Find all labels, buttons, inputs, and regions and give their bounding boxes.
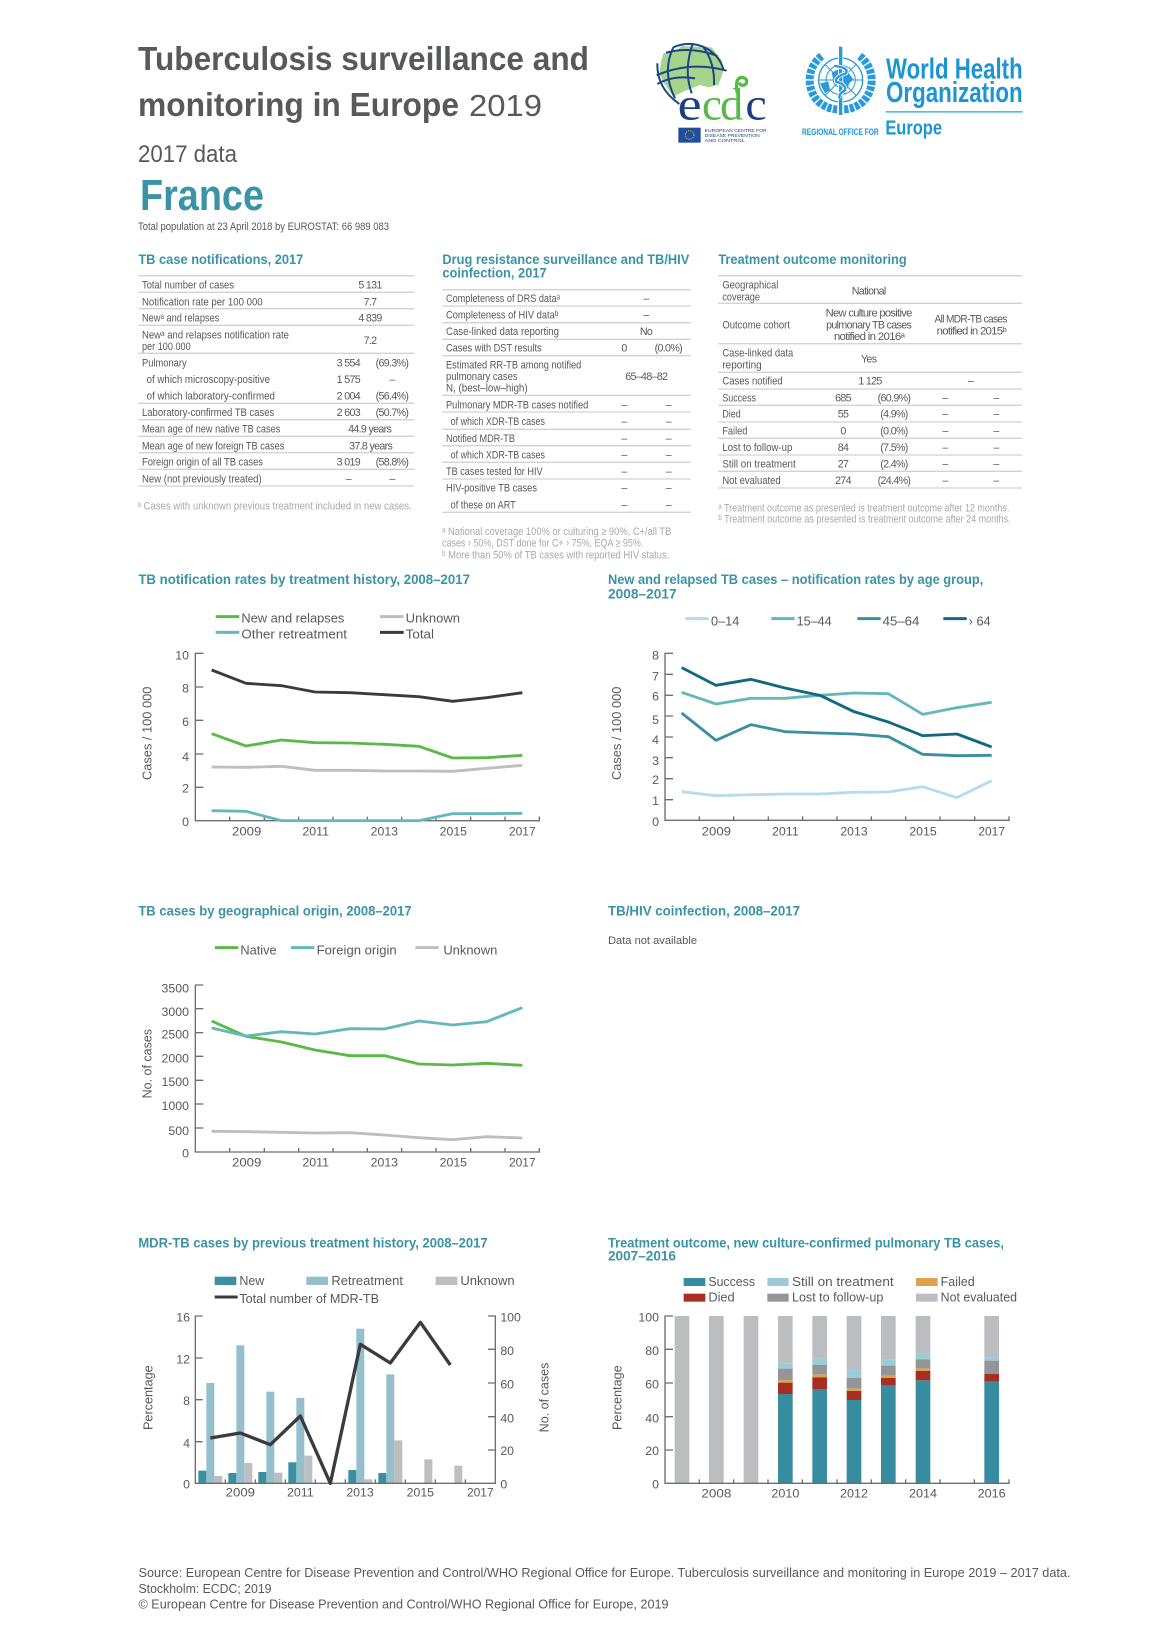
- heading: Treatment outcome monitoring: [718, 252, 907, 267]
- axes: [652, 648, 1009, 838]
- table rows: Still on treatment: [722, 458, 796, 470]
- axes: 2010: [771, 1487, 799, 1501]
- axes: 7: [652, 669, 659, 683]
- axes: 60: [500, 1377, 514, 1391]
- population note: Total population at 23 April 2018 by EUROSTAT: 66 989 083: [138, 221, 389, 233]
- axes: 2011: [772, 824, 799, 838]
- table rows: 65–48–82: [625, 371, 668, 383]
- heading: TB/HIV coinfection, 2008–2017: [608, 904, 800, 919]
- panel: MDR-TB by previous treatment bar and line chart: [138, 1235, 551, 1500]
- table rows: 0: [840, 425, 846, 437]
- table rows: All MDR-TB cases: [934, 314, 1007, 326]
- legend: Native: [240, 942, 277, 957]
- WHO wordmark: REGIONAL OFFICE FOR: [802, 127, 879, 137]
- legend: Not evaluated: [941, 1290, 1017, 1305]
- y axis title: Cases / 100 000: [609, 687, 624, 780]
- table rows: –: [621, 450, 627, 462]
- title: Tuberculosis surveillance and: [138, 40, 589, 77]
- axes: 2015: [440, 1156, 467, 1170]
- axes: 2016: [978, 1487, 1006, 1501]
- title: 2019: [469, 88, 542, 123]
- table rows: –: [666, 433, 672, 445]
- WHO wordmark: World Health: [886, 54, 1023, 86]
- axes: [175, 648, 539, 838]
- ECDC flag and name: DISEASE PREVENTION: [705, 133, 760, 139]
- header: title block: [138, 40, 589, 233]
- legend: Total: [406, 626, 434, 641]
- line series: [212, 1008, 522, 1140]
- axes: 2017: [467, 1486, 494, 1500]
- legend: Failed: [941, 1274, 975, 1289]
- table rows: (2.4%): [880, 458, 908, 470]
- table rows: 5 131: [358, 280, 382, 292]
- source footer: Source: European Centre for Disease Prevention and Control/WHO Regional Office for Europe. Tuberculosis surveillance and monitoring in Europe 2019 – 2017 data.: [138, 1565, 1070, 1580]
- axes: 2014: [909, 1487, 937, 1501]
- footnote: ᵃ Cases with unknown previous treatment included in new cases.: [137, 500, 412, 512]
- table rows: –: [942, 425, 948, 437]
- table rows: Mean age of new native TB cases: [142, 424, 281, 436]
- table rows: 7.7: [364, 296, 377, 308]
- axis titles: Percentage: [140, 1365, 155, 1430]
- table rows: –: [942, 458, 948, 470]
- table rows: –: [942, 475, 948, 487]
- table rows: [442, 290, 691, 512]
- axes: 2013: [371, 1156, 398, 1170]
- subtitle: data year: 2017 data: [138, 141, 238, 168]
- table rows: of these on ART: [451, 499, 516, 511]
- axes: 8: [183, 1394, 190, 1408]
- legend: Lost to follow-up: [792, 1290, 883, 1305]
- footnotes: [718, 503, 1011, 526]
- legend: [684, 1274, 1017, 1305]
- line series: [212, 670, 522, 821]
- table rows: Notification rate per 100 000: [142, 296, 263, 308]
- table rows: 84: [838, 442, 849, 454]
- icon: WHO emblem: [810, 47, 872, 115]
- table rows: 3 019: [337, 457, 361, 469]
- title: monitoring in Europe: [138, 86, 459, 123]
- table rows: 0: [621, 343, 627, 355]
- axes: 2015: [407, 1486, 434, 1500]
- axes: 2011: [302, 824, 329, 838]
- footnotes: ᵇ More than 50% of TB cases with reported HIV status.: [442, 549, 669, 561]
- axes: 2009: [232, 824, 261, 838]
- axes: 12: [176, 1352, 190, 1366]
- axes: 100: [638, 1311, 659, 1325]
- table rows: 1 125: [858, 376, 882, 388]
- table rows: 44.9 years: [348, 424, 392, 436]
- table rows: Foreign origin of all TB cases: [142, 457, 263, 469]
- logo: ECDC: [657, 44, 767, 144]
- WHO wordmark: Organization: [886, 77, 1023, 109]
- table rows: HIV-positive TB cases: [446, 483, 537, 495]
- table rows: Estimated RR-TB among notified: [446, 359, 581, 371]
- table rows: –: [993, 442, 999, 454]
- heading: New and relapsed TB cases – notification rates by age group,: [608, 572, 983, 587]
- table rows: 3 554: [337, 358, 361, 370]
- footnotes: cases › 50%, DST done for C+ › 75%, EQA ≥ 95%.: [442, 538, 643, 550]
- panel: cases by geographical origin line chart: [138, 904, 539, 1170]
- table rows: (7.5%): [880, 442, 908, 454]
- table rows: Case-linked data: [722, 348, 794, 360]
- table rows: –: [621, 399, 627, 411]
- panel: TB notification rates line chart: [138, 572, 539, 838]
- axes: 80: [645, 1344, 659, 1358]
- axes: 10: [175, 648, 189, 662]
- legend: 15–44: [797, 614, 832, 629]
- axis titles: [140, 1362, 551, 1432]
- table rows: Cases with DST results: [446, 343, 542, 355]
- heading: MDR-TB cases by previous treatment history, 2008–2017: [138, 1235, 488, 1250]
- axes: 2013: [371, 824, 398, 838]
- axes: 40: [500, 1411, 514, 1425]
- table rows: (50.7%): [376, 407, 408, 419]
- table rows: (0.0%): [880, 425, 908, 437]
- table rows: 274: [835, 475, 852, 487]
- table rows: Success: [722, 392, 756, 404]
- table rows: –: [666, 483, 672, 495]
- table rows: of which XDR-TB cases: [451, 416, 545, 428]
- table rows: (4.9%): [880, 409, 908, 421]
- legend: Still on treatment: [792, 1274, 894, 1289]
- table rows: per 100 000: [142, 341, 191, 353]
- axes: 4: [182, 750, 189, 764]
- source footer: Stockholm: ECDC; 2019: [138, 1581, 272, 1596]
- table rows: (69.3%): [376, 358, 408, 370]
- logo: WHO: [802, 47, 1023, 140]
- legend: Died: [708, 1290, 735, 1305]
- table rows: New culture positive: [826, 308, 912, 320]
- axes: 2011: [302, 1156, 329, 1170]
- table rows: coverage: [722, 291, 760, 303]
- table rows: Newᵃ and relapses: [142, 313, 220, 325]
- heading: Drug resistance surveillance and TB/HIV: [442, 252, 690, 267]
- panel: drug resistance and TB/HIV table: [442, 252, 691, 561]
- axes: 20: [500, 1444, 514, 1458]
- heading: Treatment outcome, new culture-confirmed pulmonary TB cases,: [608, 1235, 1004, 1250]
- country name: France: [140, 171, 264, 220]
- table rows: (56.4%): [376, 390, 408, 402]
- legend: [215, 1273, 515, 1306]
- table rows: Laboratory-confirmed TB cases: [142, 407, 275, 419]
- panel: TB/HIV coinfection: [608, 904, 800, 947]
- table rows: Outcome cohort: [722, 319, 790, 331]
- line: total MDR-TB: [210, 1322, 450, 1483]
- axes: [162, 981, 539, 1170]
- table rows: Cases notified: [722, 376, 783, 388]
- heading: 2008–2017: [608, 586, 677, 601]
- panel: treatment outcome monitoring table: [718, 252, 1022, 526]
- table rows: Completeness of DRS dataᵃ: [446, 293, 561, 305]
- table rows: No: [640, 326, 653, 338]
- panel: notification rates by age group line chart: [608, 572, 1009, 838]
- no data note: Data not available: [608, 935, 697, 947]
- legend: 0–14: [711, 614, 739, 629]
- table rows: (0.0%): [655, 343, 682, 355]
- stacked bars: [675, 1316, 999, 1483]
- legend: Unknown: [406, 611, 460, 626]
- table rows: –: [621, 499, 627, 511]
- axes: 0: [183, 1477, 190, 1491]
- legend: Success: [708, 1274, 755, 1289]
- ECDC wordmark: c: [745, 78, 767, 129]
- panel: treatment outcome stacked bar chart: [608, 1235, 1017, 1501]
- table rows: –: [389, 374, 395, 386]
- table rows: New (not previously treated): [142, 473, 262, 485]
- axes: 2017: [509, 824, 536, 838]
- footnotes: ᵃ Treatment outcome as presented is treatment outcome after 12 months.: [718, 503, 1009, 515]
- footnotes: ᵃ National coverage 100% or culturing ≥ 90%, C+/all TB: [442, 526, 671, 538]
- table rows: 1 575: [337, 374, 361, 386]
- axes: 3000: [162, 1005, 189, 1019]
- axes: 80: [500, 1344, 514, 1358]
- table rows: Mean age of new foreign TB cases: [142, 440, 285, 452]
- table rows: –: [666, 450, 672, 462]
- axes: [176, 1311, 521, 1500]
- axis titles: No. of cases: [536, 1362, 551, 1432]
- table rows: of which laboratory-confirmed: [147, 390, 275, 402]
- axes: 0: [652, 1477, 659, 1491]
- table rows: 2 603: [337, 407, 361, 419]
- legend: Retreatment: [331, 1273, 403, 1288]
- axes: 2008: [701, 1487, 731, 1501]
- table rows: of which microscopy-positive: [147, 374, 270, 386]
- table rows: 7.2: [364, 335, 377, 347]
- table rows: –: [621, 466, 627, 478]
- axes: 2012: [840, 1487, 868, 1501]
- table rows: N, (best–low–high): [446, 383, 528, 395]
- axes: 60: [645, 1377, 659, 1391]
- WHO wordmark: Europe: [885, 117, 942, 140]
- table rows: (58.8%): [376, 457, 408, 469]
- table rows: Pulmonary: [142, 358, 187, 370]
- legend: Foreign origin: [317, 942, 397, 957]
- table rows: –: [666, 399, 672, 411]
- title: [138, 40, 589, 123]
- heading: coinfection, 2017: [442, 266, 547, 281]
- table rows: [718, 276, 1022, 488]
- table rows: of which XDR-TB cases: [451, 450, 545, 462]
- table rows: –: [993, 409, 999, 421]
- table rows: –: [942, 442, 948, 454]
- axes: 2500: [162, 1027, 189, 1041]
- axes: 5: [652, 713, 659, 727]
- table rows: pulmonary cases: [446, 371, 518, 383]
- table rows: –: [968, 376, 974, 388]
- y axis title: No. of cases: [140, 1029, 155, 1098]
- table rows: –: [993, 425, 999, 437]
- icon: ECDC globe: [657, 44, 727, 104]
- y axis title: Cases / 100 000: [140, 687, 155, 780]
- axes: 3: [652, 754, 659, 768]
- table rows: Newᵃ and relapses notification rate: [142, 329, 289, 341]
- footnotes: ᵇ Treatment outcome as presented is treatment outcome after 24 months.: [718, 514, 1011, 526]
- axes: 2000: [162, 1051, 189, 1065]
- axes: 4: [652, 733, 659, 747]
- ECDC flag and name: AND CONTROL: [705, 138, 745, 144]
- heading: [608, 1235, 1004, 1264]
- ECDC wordmark: [678, 77, 767, 129]
- axes: 0: [652, 815, 659, 829]
- ECDC wordmark: e: [678, 78, 702, 129]
- axes: 2009: [232, 1156, 261, 1170]
- axes: 2013: [840, 824, 868, 838]
- table rows: –: [993, 392, 999, 404]
- table rows: 37.8 years: [349, 440, 393, 452]
- line series: [682, 668, 992, 798]
- axes: [638, 1311, 1009, 1501]
- axes: 2017: [509, 1156, 536, 1170]
- table rows: reporting: [722, 359, 762, 371]
- axes: 2015: [440, 824, 467, 838]
- table rows: –: [643, 293, 649, 305]
- table rows: Lost to follow-up: [722, 442, 792, 454]
- legend: › 64: [969, 614, 991, 629]
- axes: 40: [645, 1411, 659, 1425]
- panel: TB case notifications table: [137, 252, 414, 512]
- source footer: © European Centre for Disease Prevention and Control/WHO Regional Office for Europe, 2019: [138, 1596, 668, 1612]
- axes: 16: [176, 1311, 190, 1325]
- legend: New: [239, 1273, 265, 1288]
- axes: 1500: [162, 1075, 189, 1089]
- axes: 2011: [287, 1486, 314, 1500]
- axes: 2009: [226, 1486, 255, 1500]
- axes: 6: [182, 715, 189, 729]
- table rows: notified in 2015ᵇ: [937, 325, 1007, 337]
- axes: 2: [652, 773, 659, 787]
- axes: 0: [182, 815, 189, 829]
- table rows: Failed: [722, 425, 747, 437]
- table rows: –: [942, 392, 948, 404]
- table rows: Geographical: [722, 280, 778, 292]
- table rows: –: [621, 483, 627, 495]
- table rows: –: [993, 458, 999, 470]
- legend: Other retreatment: [241, 626, 347, 641]
- table rows: 55: [838, 409, 849, 421]
- ECDC wordmark: d: [720, 78, 744, 129]
- table rows: pulmonary TB cases: [826, 319, 912, 331]
- axes: 1000: [162, 1099, 189, 1113]
- table rows: Yes: [861, 353, 877, 365]
- legend: [685, 614, 991, 629]
- source footer: [138, 1565, 1070, 1612]
- table rows: notified in 2016ᵃ: [834, 331, 906, 343]
- axes: 2009: [702, 824, 731, 838]
- table rows: –: [346, 473, 352, 485]
- legend: New and relapses: [241, 611, 345, 626]
- footnotes: [442, 526, 671, 561]
- table rows: National: [852, 285, 886, 297]
- table rows: –: [643, 310, 649, 322]
- heading: TB notification rates by treatment history, 2008–2017: [138, 572, 470, 587]
- table rows: –: [666, 499, 672, 511]
- ECDC flag and name: EUROPEAN CENTRE FOR: [705, 128, 767, 134]
- table rows: –: [621, 433, 627, 445]
- heading: TB case notifications, 2017: [138, 252, 303, 267]
- bars: [198, 1329, 462, 1483]
- table rows: 4 839: [358, 313, 382, 325]
- axes: 1: [652, 794, 659, 808]
- legend: Unknown: [460, 1273, 515, 1288]
- axes: 0: [500, 1477, 507, 1491]
- axes: 20: [645, 1444, 659, 1458]
- table rows: (24.4%): [878, 475, 910, 487]
- y axis title: Percentage: [610, 1365, 625, 1430]
- table rows: –: [389, 473, 395, 485]
- table rows: Not evaluated: [722, 475, 781, 487]
- table rows: Notified MDR-TB: [446, 433, 515, 445]
- axes: 2015: [909, 824, 937, 838]
- table rows: Total number of cases: [142, 280, 234, 292]
- axes: 2017: [978, 824, 1005, 838]
- axes: 100: [500, 1311, 521, 1325]
- table rows: –: [942, 409, 948, 421]
- ECDC flag and name: [678, 128, 767, 144]
- table rows: Died: [722, 409, 741, 421]
- table rows: –: [993, 475, 999, 487]
- legend: [216, 611, 460, 641]
- heading: [442, 252, 690, 281]
- axes: 0: [182, 1146, 189, 1160]
- table rows: TB cases tested for HIV: [446, 466, 543, 478]
- legend: [215, 942, 497, 957]
- table rows: Completeness of HIV dataᵇ: [446, 310, 558, 322]
- table rows: –: [666, 416, 672, 428]
- table rows: Case-linked data reporting: [446, 326, 559, 338]
- ECDC wordmark: c: [702, 78, 722, 129]
- axes: 2: [182, 782, 189, 796]
- legend: Unknown: [443, 942, 497, 957]
- table rows: 2 004: [337, 390, 361, 402]
- heading: [608, 572, 983, 601]
- legend: 45–64: [883, 614, 919, 629]
- heading: 2007–2016: [608, 1249, 676, 1264]
- heading: TB cases by geographical origin, 2008–2017: [138, 904, 412, 919]
- axes: 2013: [346, 1486, 374, 1500]
- axes: 3500: [162, 981, 189, 995]
- axes: 4: [183, 1437, 190, 1451]
- table rows: [138, 276, 414, 486]
- WHO wordmark: [802, 54, 1023, 140]
- axes: 6: [652, 690, 659, 704]
- table rows: 27: [838, 458, 849, 470]
- axes: 8: [652, 648, 659, 662]
- table rows: (60.9%): [878, 392, 910, 404]
- table rows: –: [666, 466, 672, 478]
- legend: Total number of MDR-TB: [239, 1291, 379, 1306]
- axes: 8: [182, 681, 189, 695]
- table rows: –: [621, 416, 627, 428]
- table rows: Pulmonary MDR-TB cases notified: [446, 399, 588, 411]
- table rows: 685: [835, 392, 852, 404]
- axes: 500: [168, 1124, 189, 1138]
